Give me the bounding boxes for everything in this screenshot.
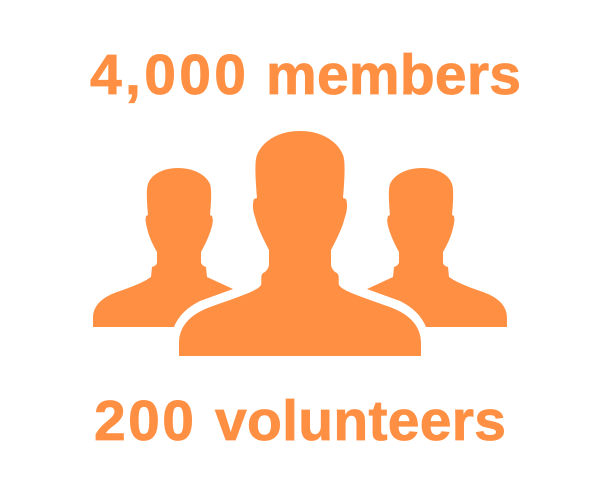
icon: right person (367, 168, 507, 327)
icon: left person (93, 168, 233, 327)
icon: centre person (179, 131, 421, 356)
heading: 4,000 members (90, 43, 521, 107)
heading: 4,000 members: members (266, 43, 521, 107)
heading: 4,000 members: 4,000 (90, 43, 246, 107)
heading: 200 volunteers: volunteers (215, 389, 506, 453)
icon: group of three people (93, 131, 507, 356)
heading: 200 volunteers: 200 (94, 389, 194, 453)
